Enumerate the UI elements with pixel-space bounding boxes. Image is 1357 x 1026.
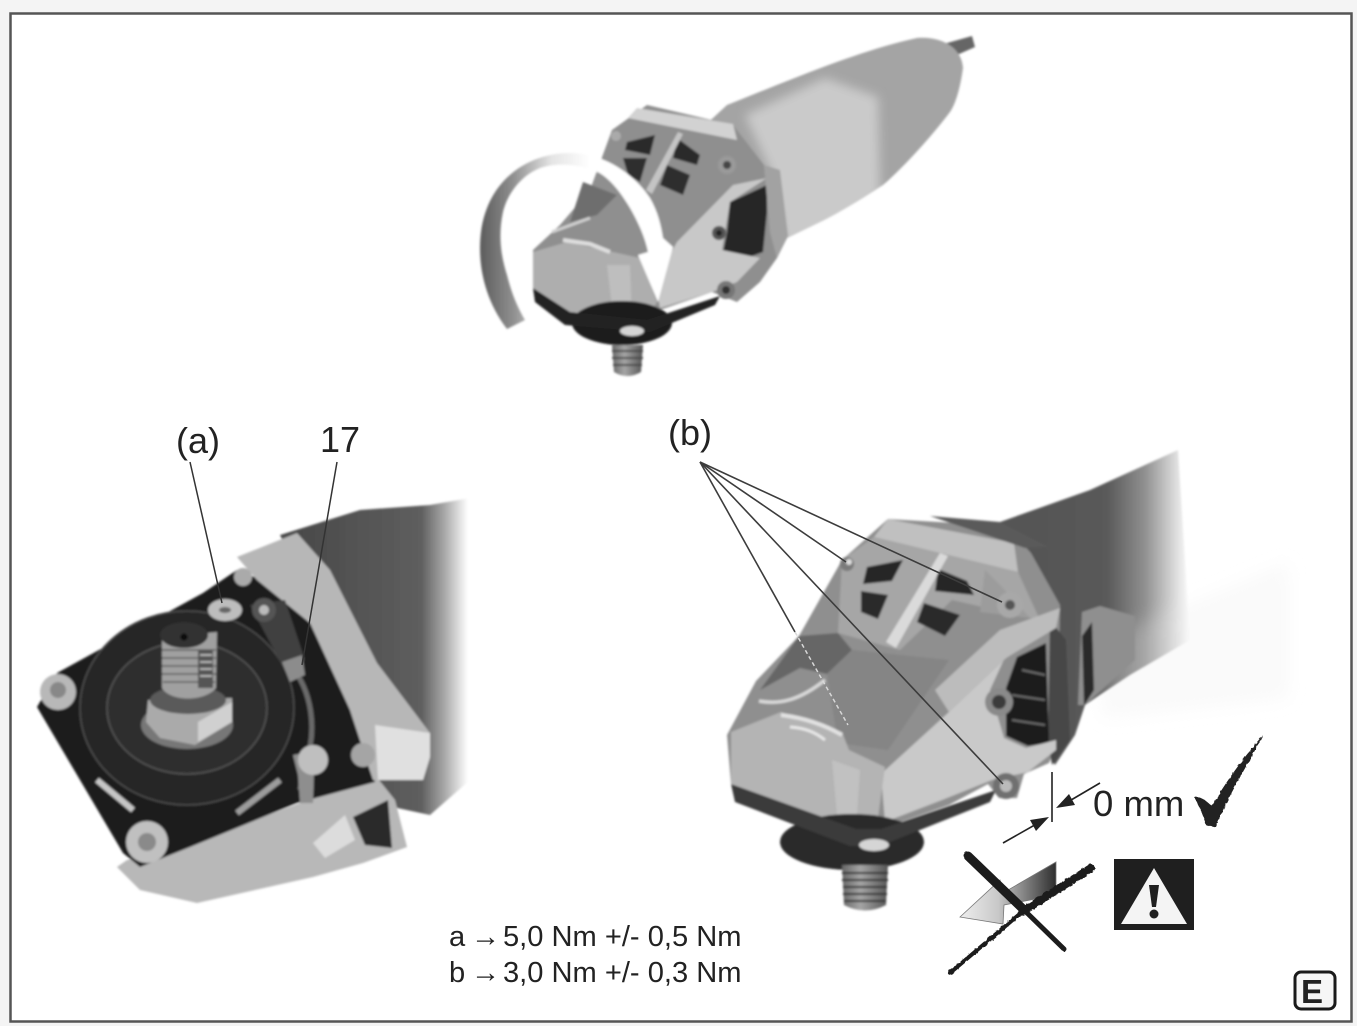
switch bbox=[1078, 606, 1135, 705]
spindle bbox=[842, 865, 888, 910]
side blade bbox=[657, 178, 767, 308]
side band and opening bbox=[1048, 620, 1070, 765]
icon: crossed-out arrow bbox=[950, 856, 1091, 973]
icon: check mark bbox=[1194, 735, 1263, 827]
bright blade bbox=[881, 625, 1058, 822]
cable stub bbox=[940, 36, 975, 58]
head front bbox=[760, 633, 852, 690]
torque values: 3,0 Nm +/- 0,3 Nm bbox=[503, 957, 741, 989]
head casting bbox=[727, 519, 1060, 829]
torque values: → bbox=[471, 957, 500, 989]
base flange bbox=[780, 814, 924, 870]
head front bbox=[570, 182, 617, 222]
screws bbox=[840, 557, 854, 571]
screws bbox=[40, 674, 76, 710]
lower housing bbox=[117, 775, 407, 903]
gap dimension: 0 mm: 0 mm bbox=[1093, 783, 1184, 824]
side opening bbox=[723, 185, 767, 258]
ring assembly bbox=[80, 611, 294, 805]
figure letter E bbox=[1295, 972, 1335, 1010]
screws bbox=[611, 131, 621, 141]
bracket and wire 17 bbox=[250, 600, 305, 665]
rotation arrow bbox=[480, 153, 673, 329]
torque values: a bbox=[449, 921, 465, 953]
label: 17: 17 bbox=[320, 419, 360, 460]
spindle bbox=[141, 701, 233, 749]
illustration: top grinder bbox=[480, 36, 975, 376]
motor body bbox=[280, 498, 470, 815]
label: (a): (a) bbox=[176, 420, 220, 461]
leader lines (b) bbox=[700, 462, 1003, 784]
torque values: 5,0 Nm +/- 0,5 Nm bbox=[503, 921, 741, 953]
dark base plate bbox=[37, 570, 375, 867]
illustration: right grinder bbox=[727, 450, 1290, 910]
head casting bbox=[533, 105, 777, 318]
spindle bbox=[612, 345, 643, 376]
motor housing bbox=[700, 38, 963, 258]
label: (b): (b) bbox=[668, 412, 712, 453]
base flange bbox=[572, 301, 672, 345]
figure letter E: E bbox=[1301, 973, 1323, 1010]
silver collar bbox=[237, 533, 430, 780]
vents bbox=[625, 135, 655, 155]
icon: warning sign bbox=[1114, 859, 1194, 930]
torque values bbox=[449, 921, 741, 989]
torque values: → bbox=[471, 921, 500, 953]
motor body bbox=[1000, 450, 1190, 765]
top rim bbox=[874, 519, 1018, 572]
leader lines (a) and 17 bbox=[190, 462, 337, 665]
gap dimension: 0 mm bbox=[1003, 772, 1184, 843]
illustration: left grinder bbox=[37, 498, 470, 903]
vents bbox=[863, 560, 903, 584]
torque values: b bbox=[449, 957, 465, 989]
